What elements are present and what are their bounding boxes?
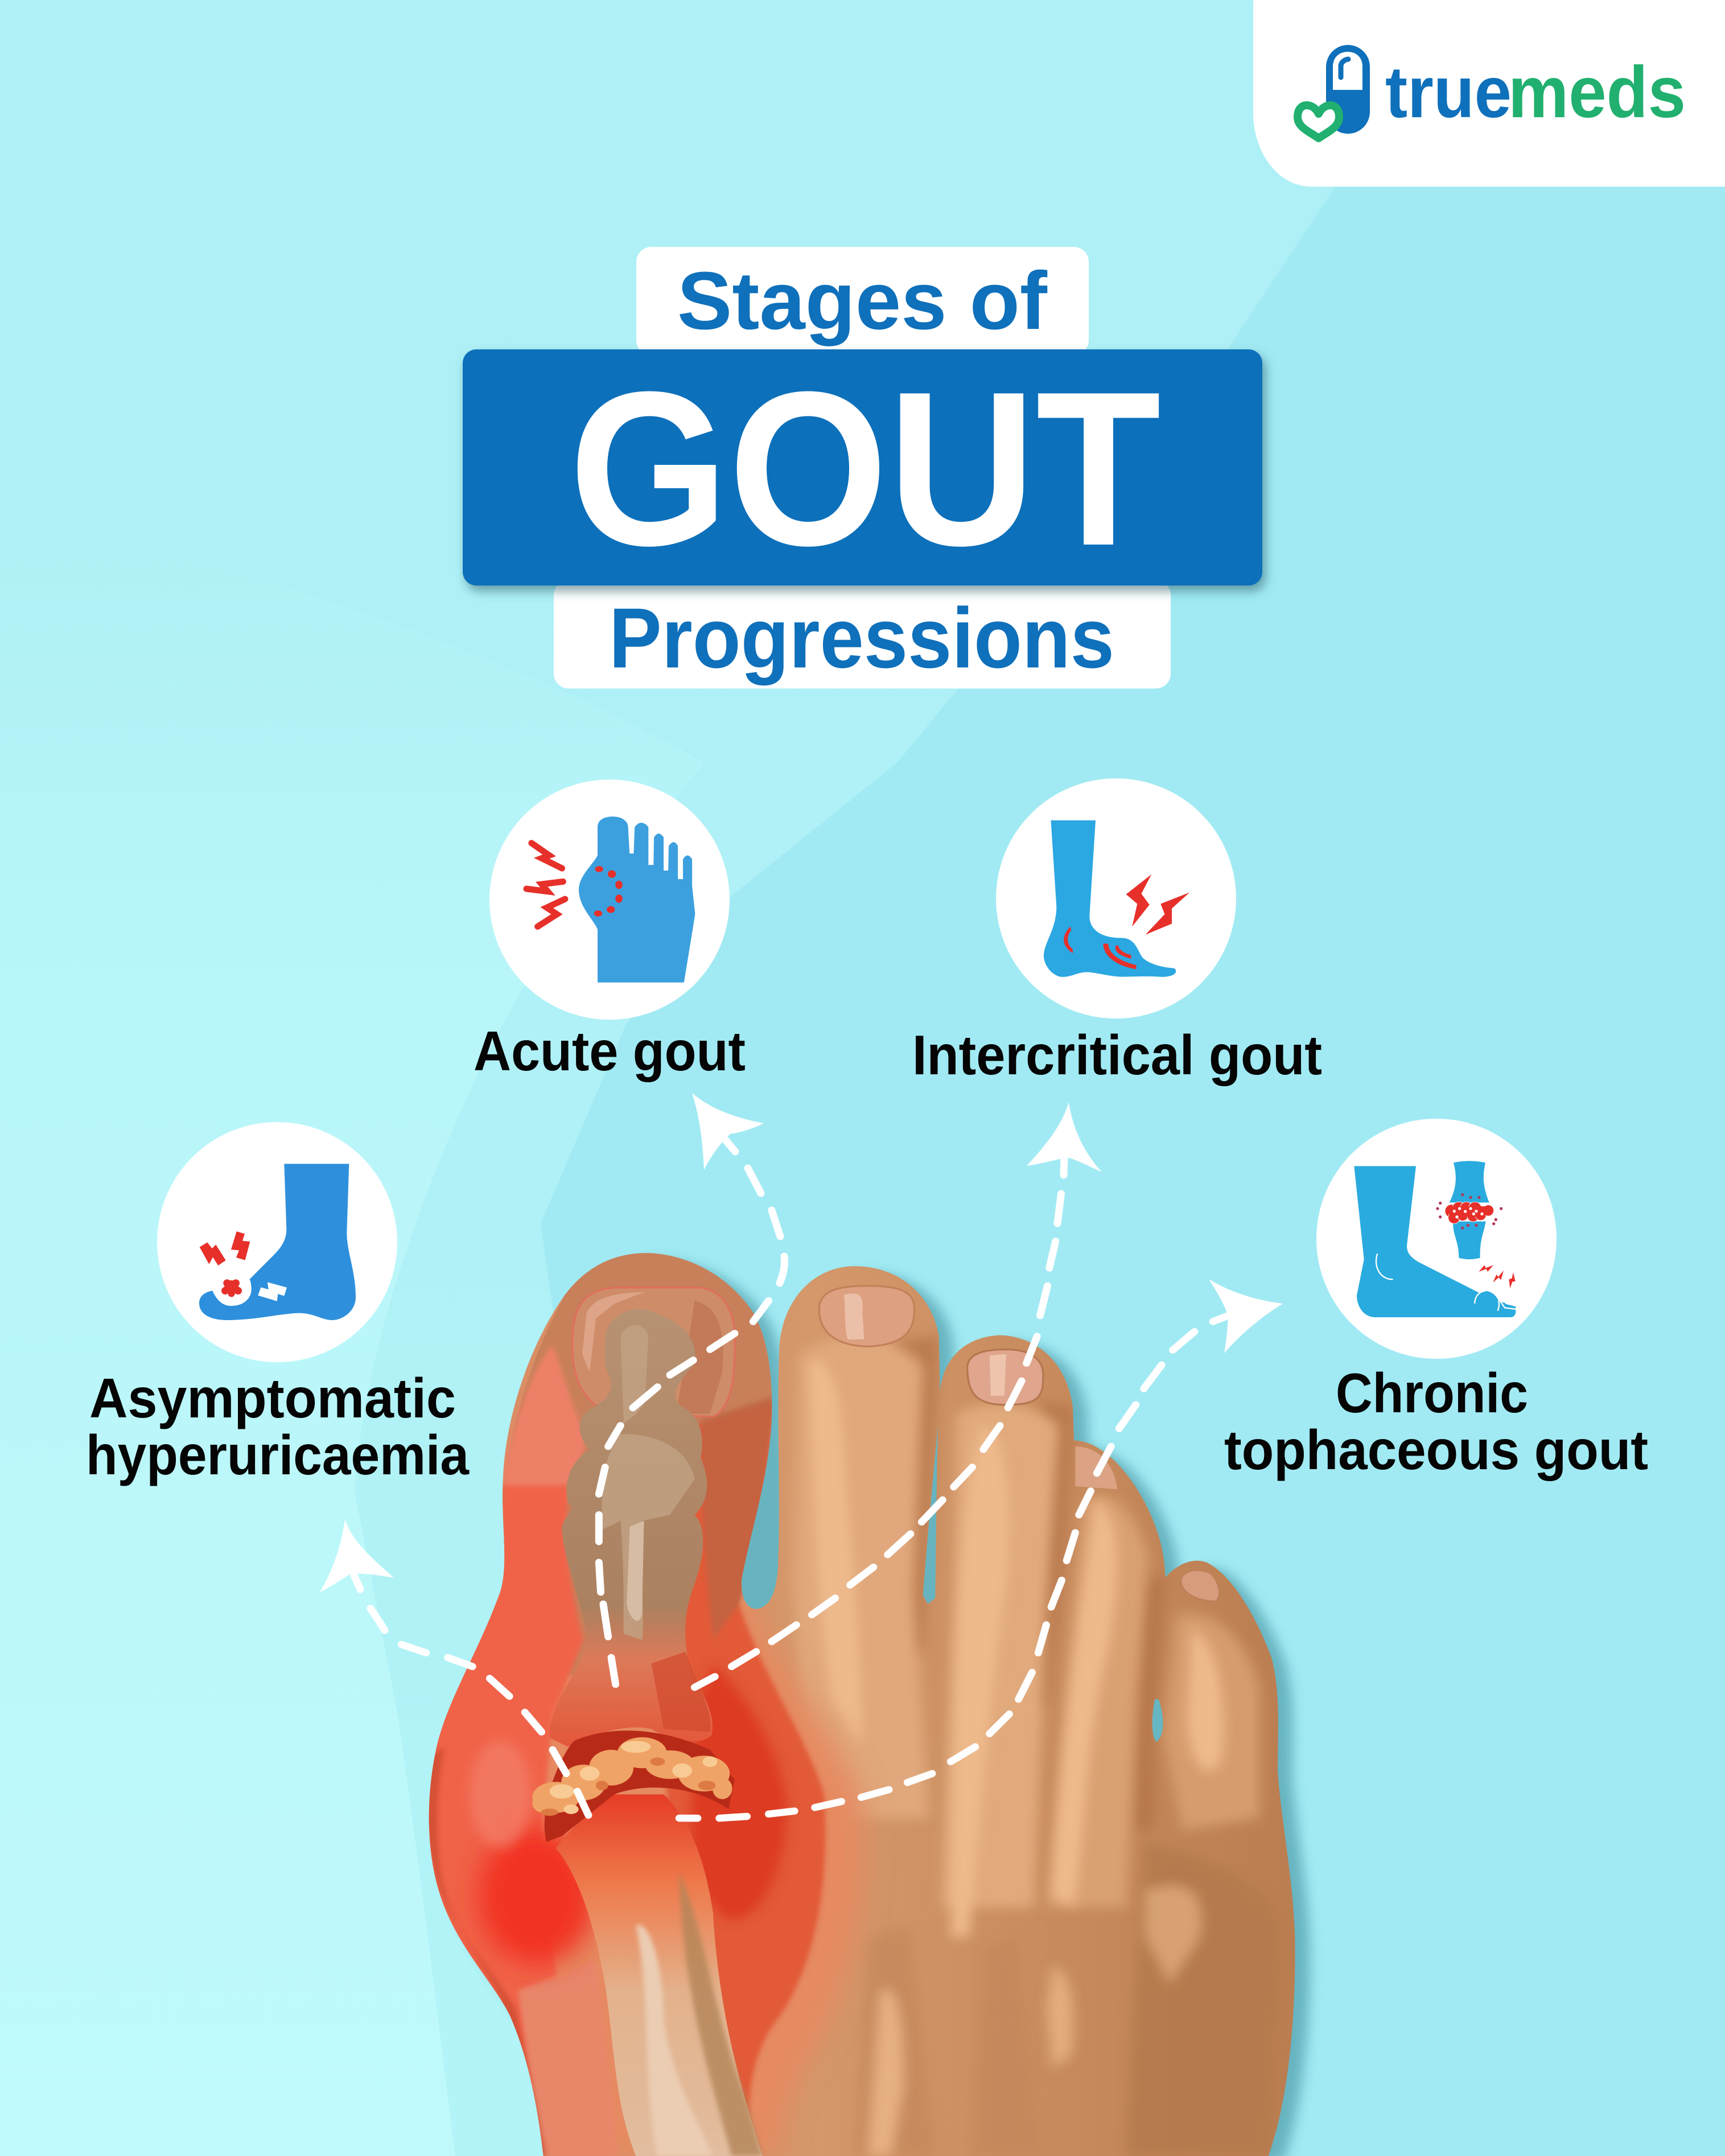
tophus joint crust — [532, 1730, 735, 1842]
arrow: to chronic tophaceous gout — [679, 1279, 1283, 1818]
foot body — [398, 1223, 1324, 2156]
label: Asymptomatic hyperuricaemia: hyperuricaemia — [86, 1424, 470, 1486]
label: Acute gout: Acute gout — [474, 1020, 746, 1082]
panel: acute gout — [474, 780, 746, 1082]
toenails — [819, 1286, 1219, 1601]
icon: foot side view with pain bolts — [996, 778, 1236, 1019]
toe bones — [549, 1309, 713, 1747]
toe gap — [1152, 1699, 1163, 1742]
label: Chronic tophaceous gout: Chronic — [1336, 1362, 1528, 1424]
bunion highlights — [479, 1827, 596, 1964]
arrow: to asymptomatic hyperuricaemia — [320, 1519, 588, 1815]
arrow: to acute gout — [599, 1093, 785, 1684]
icon: foot with sore toe — [157, 1122, 397, 1362]
foot shadow — [444, 1260, 1310, 2156]
redness around joint — [423, 1592, 864, 2156]
toe highlights — [809, 1360, 1224, 2156]
panel: intercritical gout — [912, 778, 1322, 1086]
label: Intercritical gout: Intercritical gout — [912, 1024, 1322, 1086]
panel: asymptomatic hyperuricaemia — [86, 1122, 470, 1486]
label: Asymptomatic hyperuricaemia: Asymptomatic — [89, 1367, 456, 1429]
label: Chronic tophaceous gout — [1224, 1362, 1648, 1481]
panel: chronic tophaceous gout — [1224, 1119, 1648, 1481]
label: Chronic tophaceous gout: tophaceous gout — [1224, 1419, 1648, 1481]
label: Asymptomatic hyperuricaemia — [86, 1367, 470, 1486]
logo panel — [1253, 0, 1725, 187]
big toe base — [491, 1253, 772, 1675]
icon: capsule with heart — [1298, 45, 1370, 138]
big toe nail — [573, 1288, 735, 1417]
icon: forefoot with joint pain — [489, 780, 730, 1020]
title: Stages of — [636, 247, 1089, 355]
arrow: to intercritical gout — [694, 1102, 1102, 1687]
title: GOUT: GOUT — [569, 346, 1161, 591]
foot edge shading — [892, 1337, 1166, 1830]
metatarsal bone — [555, 1794, 763, 2156]
icon: foot with joint tophi — [1316, 1119, 1557, 1359]
toe shading — [793, 1335, 1281, 2156]
big toe redness — [398, 1345, 825, 2156]
logo wordmark: meds — [1508, 52, 1686, 133]
title: Progressions: Progressions — [609, 590, 1114, 686]
logo wordmark: true — [1385, 52, 1512, 133]
title block — [463, 247, 1262, 689]
foot illustration — [398, 1223, 1324, 2156]
title: Stages of: Stages of — [677, 255, 1048, 347]
logo wordmark — [1385, 52, 1686, 133]
